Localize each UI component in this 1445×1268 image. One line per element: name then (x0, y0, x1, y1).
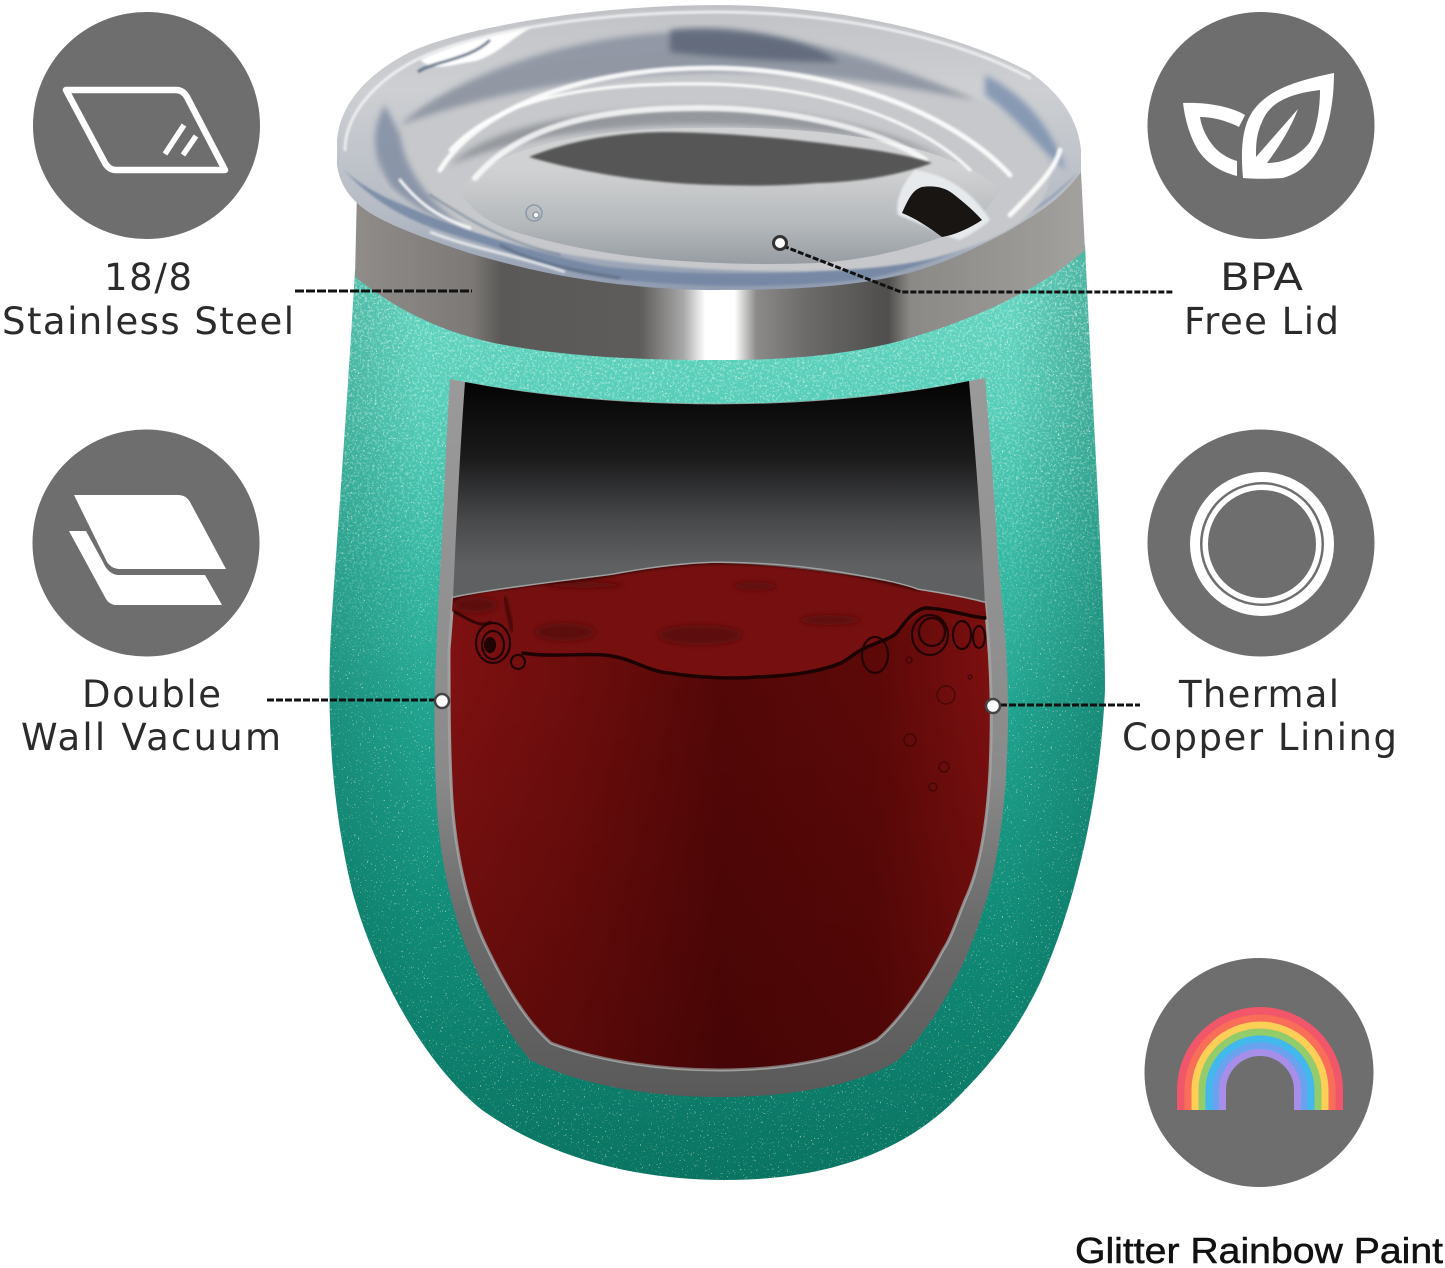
feature: stainless steel (2, 12, 294, 343)
lower left lip crease (500, 245, 620, 278)
feature: glitter rainbow paint (1075, 958, 1443, 1268)
lid lower lip (342, 168, 1078, 286)
icon: double wall (32, 430, 260, 656)
label: 18/8: 18/8 (104, 256, 192, 299)
icon: leaves (1148, 12, 1374, 239)
label: Copper Lining: Copper Lining (1122, 716, 1397, 759)
window rim (434, 378, 1008, 1097)
label: Stainless Steel: Stainless Steel (2, 300, 294, 343)
label: Thermal: Thermal (1178, 673, 1339, 716)
lid floor (459, 128, 1000, 264)
icon: rings (1148, 430, 1374, 656)
sip hole (897, 170, 990, 240)
steel band (355, 172, 1085, 360)
label: Free Lid: Free Lid (1184, 300, 1339, 343)
dot: lid (774, 236, 786, 250)
wine surface (450, 563, 990, 677)
leader: double wall (267, 698, 436, 702)
leader: stainless steel (295, 290, 472, 292)
wine (440, 563, 1000, 1080)
small vent (526, 205, 542, 221)
lid shell (337, 5, 1081, 290)
icon: stainless plate (33, 12, 260, 239)
lid reflections (345, 12, 1060, 255)
lid (337, 5, 1081, 290)
dot: double wall (435, 694, 449, 708)
feature: thermal copper lining (1122, 430, 1397, 759)
tumbler body (320, 230, 1120, 1190)
leader: lid (783, 246, 1173, 292)
notch highlight (418, 28, 530, 72)
feature: double wall vacuum (21, 430, 281, 759)
label: Double: Double (82, 673, 221, 716)
lid dark lens (529, 132, 932, 186)
feature: BPA free lid (1148, 12, 1374, 343)
window interior (453, 381, 985, 605)
lid well (375, 28, 1066, 271)
label: Wall Vacuum: Wall Vacuum (21, 716, 281, 759)
label: BPA: BPA (1220, 256, 1303, 299)
leader: thermal (1000, 704, 1140, 706)
tumbler (320, 5, 1120, 1190)
bubbles (476, 615, 985, 791)
icon: rainbow (1144, 958, 1374, 1187)
dot: thermal (986, 699, 1000, 713)
